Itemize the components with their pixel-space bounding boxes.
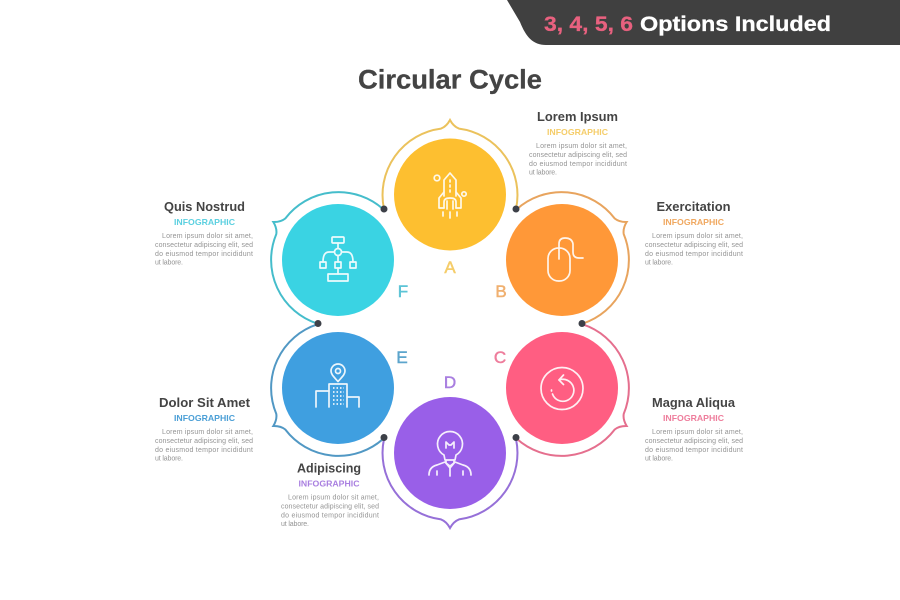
icon: mouse: [548, 238, 583, 281]
text block: Quis Nostrud: INFOGRAPHIC: [174, 217, 235, 227]
letter E: E: [396, 348, 408, 367]
text block: Lorem Ipsum: Lorem ipsum dolor sit amet,: [536, 143, 627, 150]
text block: Quis Nostrud: do eiusmod tempor incididunt: [155, 251, 253, 258]
letter C: C: [494, 348, 506, 367]
text block: Exercitation: [645, 199, 743, 266]
text block: Dolor Sit Amet: consectetur adipiscing elit, sed: [155, 438, 253, 445]
letter D: D: [444, 373, 456, 392]
text block: Adipiscing: Lorem ipsum dolor sit amet,: [288, 494, 379, 502]
text block: Magna Aliqua: do eiusmod tempor incididunt: [645, 447, 743, 454]
circle D: [394, 397, 506, 509]
icon: lightbulb person: [429, 432, 471, 476]
outline arc: E: [240, 323, 384, 484]
icon: building with pin: [316, 364, 359, 407]
text block: Adipiscing: do eiusmod tempor incididunt: [281, 512, 379, 520]
banner: options included: Options Included: [640, 13, 831, 36]
outline arc: D: [383, 439, 517, 528]
circle F: [282, 204, 394, 316]
text block: Magna Aliqua: ut labore.: [645, 456, 673, 462]
text block: Quis Nostrud: Quis Nostrud: [164, 199, 245, 214]
text block: Adipiscing: consectetur adipiscing elit, sed: [281, 504, 379, 510]
banner: options included: 3, 4, 5, 6: [544, 13, 633, 36]
circle C: [506, 332, 618, 444]
text block: Dolor Sit Amet: [155, 395, 253, 462]
text block: Exercitation: consectetur adipiscing elit, sed: [645, 242, 743, 249]
text block: Dolor Sit Amet: ut labore.: [155, 456, 183, 462]
text block: Magna Aliqua: Lorem ipsum dolor sit amet,: [652, 429, 743, 436]
text block: Exercitation: ut labore.: [645, 260, 673, 266]
outline arc: A: [383, 120, 517, 209]
text block: Dolor Sit Amet: do eiusmod tempor incididunt: [155, 447, 253, 454]
letter B: B: [495, 282, 507, 301]
text block: Quis Nostrud: ut labore.: [155, 260, 183, 266]
text block: Adipiscing: Adipiscing: [297, 460, 361, 476]
letter A: A: [444, 258, 456, 277]
text block: Adipiscing: [281, 460, 379, 528]
circle E: [282, 332, 394, 444]
icon: refresh: [541, 368, 583, 410]
text block: Quis Nostrud: consectetur adipiscing elit, sed: [155, 242, 253, 249]
letter F: F: [398, 282, 408, 301]
outline arc: B: [516, 164, 660, 325]
text block: Dolor Sit Amet: Dolor Sit Amet: [159, 395, 251, 410]
text block: Adipiscing: INFOGRAPHIC: [298, 478, 360, 488]
text block: Magna Aliqua: [645, 395, 743, 462]
icon: flowchart: [320, 237, 356, 281]
text block: Dolor Sit Amet: INFOGRAPHIC: [174, 413, 235, 423]
text block: Quis Nostrud: Lorem ipsum dolor sit amet,: [162, 233, 253, 240]
text block: Quis Nostrud: [155, 199, 253, 266]
text block: Exercitation: do eiusmod tempor incididunt: [645, 251, 743, 258]
text block: Magna Aliqua: consectetur adipiscing elit, sed: [645, 438, 743, 445]
text block: Lorem Ipsum: consectetur adipiscing elit, sed: [529, 152, 627, 159]
text block: Dolor Sit Amet: Lorem ipsum dolor sit amet,: [162, 429, 253, 436]
text block: Lorem Ipsum: do eiusmod tempor incididunt: [529, 161, 627, 168]
text block: Magna Aliqua: INFOGRAPHIC: [663, 413, 724, 423]
text block: Lorem Ipsum: ut labore.: [529, 170, 557, 176]
title: Circular Cycle: [358, 64, 542, 94]
text block: Lorem Ipsum: [529, 109, 627, 176]
text block: Exercitation: Lorem ipsum dolor sit amet,: [652, 233, 743, 240]
text block: Lorem Ipsum: Lorem Ipsum: [537, 109, 618, 124]
connector dots: [314, 206, 586, 441]
outline arc: C: [516, 323, 660, 484]
icon: rocket: [434, 173, 466, 218]
text block: Magna Aliqua: Magna Aliqua: [652, 395, 736, 410]
text block: Exercitation: Exercitation: [656, 199, 731, 214]
text block: Lorem Ipsum: INFOGRAPHIC: [547, 127, 608, 137]
text block: Exercitation: INFOGRAPHIC: [663, 217, 724, 227]
text block: Adipiscing: ut labore.: [281, 521, 309, 528]
circle A: [394, 138, 506, 250]
outline arc: F: [240, 164, 384, 325]
banner: options included: [507, 0, 900, 45]
circle B: [506, 204, 618, 316]
